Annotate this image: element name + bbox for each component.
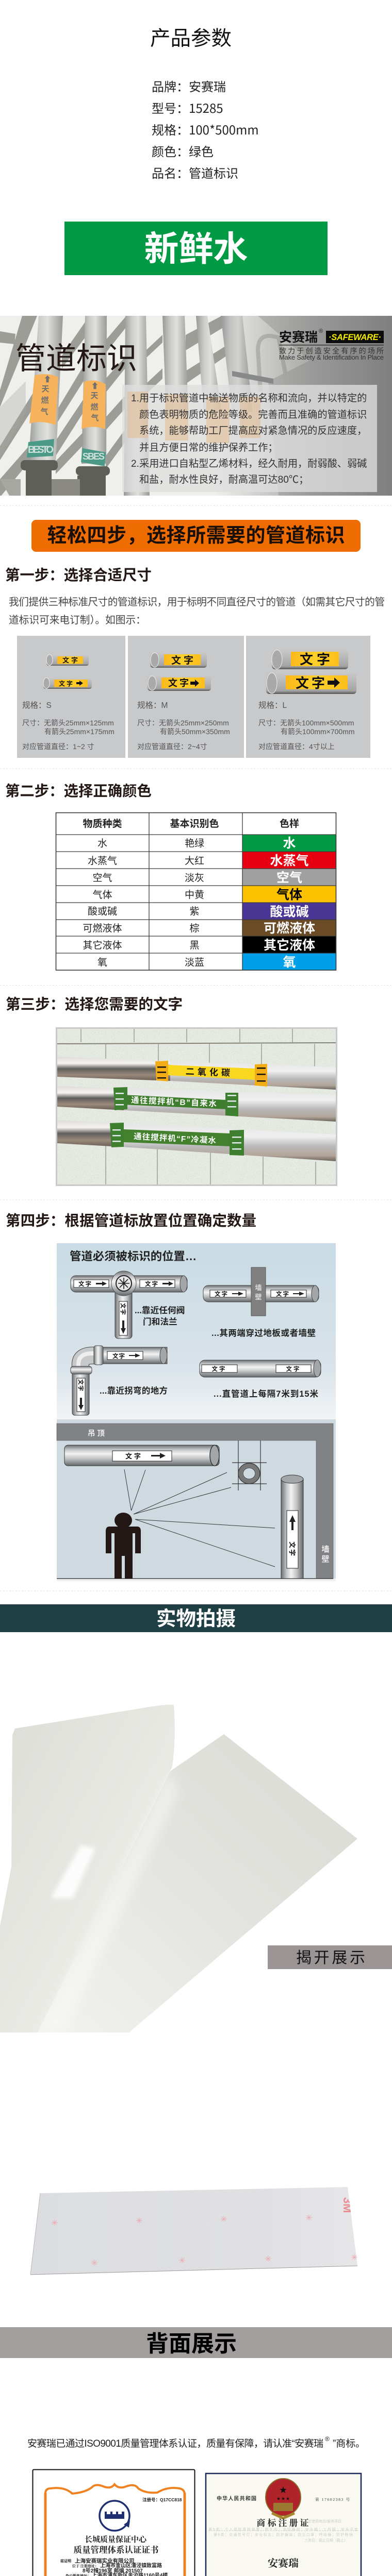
faint goods lines: 三类目；截止日期（截止） bbox=[304, 2538, 348, 2543]
certificate text: 8号2幢196室 邮编 201507 bbox=[83, 2567, 143, 2574]
table rows: 水 bbox=[97, 838, 107, 849]
orange pipe labels: 天 bbox=[90, 392, 99, 400]
product parameter list: 15285 bbox=[189, 98, 223, 116]
straight pipe: 文字 bbox=[211, 1365, 227, 1372]
person silhouette bbox=[106, 1513, 141, 1579]
orange pipe labels: 燃 bbox=[90, 402, 99, 412]
ceiling and wall bbox=[57, 1423, 333, 1579]
color identification table bbox=[56, 812, 336, 970]
photo: peeled sheet bbox=[0, 1705, 357, 2032]
green label B: 通往搅拌机“B”自来水 bbox=[131, 1095, 217, 1109]
pipe S with arrow bbox=[43, 678, 92, 689]
sight lines bbox=[124, 1469, 275, 1567]
color swatches bbox=[242, 835, 336, 970]
brand logo bbox=[279, 328, 384, 361]
table rows: 淡蓝 bbox=[185, 957, 204, 968]
orange pipe labels: 气 bbox=[91, 413, 99, 422]
table rows: 紫 bbox=[189, 906, 200, 917]
certification statement bbox=[27, 2435, 365, 2449]
national emblem: ★ ★ ★ bbox=[277, 2497, 289, 2501]
orange pipe labels: 气 bbox=[40, 407, 48, 416]
header text: 第 17602383 号 bbox=[315, 2497, 350, 2502]
product parameter list: 100*500mm bbox=[189, 120, 259, 138]
fold shine bbox=[38, 1771, 178, 2032]
pipe L with arrow bbox=[266, 673, 356, 694]
banner: four easy steps bbox=[31, 520, 361, 552]
caption: every 7 to 15 meters: ...直管道上每隔7米到15米 bbox=[214, 1388, 319, 1399]
certificate text: 质量管理体系认证证书 bbox=[73, 2545, 159, 2555]
panel: size S bbox=[17, 636, 125, 758]
translucent description panel: 系统，能够帮助工厂提高应对紧急情况的反应速度， bbox=[139, 425, 367, 436]
valve tee pipe bbox=[71, 1271, 187, 1338]
brand logo: ® bbox=[319, 328, 323, 334]
pipe L without arrow: 文字 bbox=[300, 652, 334, 667]
certificate title: 商标注册证 bbox=[257, 2518, 311, 2528]
green asbestos bands bbox=[27, 439, 106, 466]
translucent description panel: 并且方便日常的维护保养工作； bbox=[139, 442, 278, 453]
ceiling and wall: 墙 bbox=[321, 1545, 330, 1554]
orange pipe labels bbox=[29, 374, 106, 429]
vertical wall pipe bbox=[281, 1475, 303, 1579]
certificate text bbox=[60, 2497, 182, 2576]
national emblem: ★ bbox=[279, 2486, 287, 2495]
table rows bbox=[83, 838, 204, 968]
product parameter list: 品名： bbox=[152, 163, 189, 181]
swatch labels: 空气 bbox=[276, 871, 302, 885]
table rows: 氧 bbox=[97, 957, 107, 968]
product parameter list: 颜色： bbox=[152, 142, 189, 160]
header text bbox=[217, 2495, 350, 2502]
green product sample label bbox=[64, 222, 328, 275]
pipe 1 bbox=[57, 1057, 170, 1081]
swatch labels: 可燃液体 bbox=[264, 921, 315, 936]
caption: near bends: ...靠近拐弯的地方 bbox=[100, 1385, 168, 1396]
pink liner marks: ✳ bbox=[51, 2219, 58, 2228]
translucent description panel: 颜色表明物质的危险等级。完善而且准确的管道标识 bbox=[139, 409, 367, 420]
certificate text: 位于 注册地址： bbox=[72, 2564, 99, 2568]
orange pipe labels: ⬆ bbox=[43, 375, 52, 384]
caption: near valves and flanges: 门和法兰 bbox=[143, 1317, 177, 1327]
elbow pipe: 文字 bbox=[77, 1379, 85, 1392]
caption: near valves and flanges: ...靠近任何阀 bbox=[135, 1306, 185, 1315]
size M text: 规格：M bbox=[137, 701, 168, 710]
banner: back display: 背面展示 bbox=[146, 2331, 237, 2357]
size L text: 尺寸：无箭头100mm×500mm bbox=[258, 719, 354, 727]
product parameter list: 绿色 bbox=[189, 142, 214, 160]
table rows: 大红 bbox=[185, 855, 204, 867]
pink liner marks bbox=[51, 2214, 358, 2268]
size M text: 尺寸：无箭头25mm×250mm bbox=[137, 719, 229, 727]
size S text: 尺寸：无箭头25mm×125mm bbox=[22, 719, 114, 727]
wall crossing pipe: 文字 bbox=[215, 1290, 228, 1297]
table rows: 艳绿 bbox=[185, 838, 204, 849]
table header: 物质种类 bbox=[83, 818, 122, 829]
banner: four easy steps: 轻松四步，选择所需要的管道标识 bbox=[47, 525, 345, 547]
straight pipe: 文字 bbox=[286, 1365, 301, 1372]
step 1 description bbox=[9, 594, 385, 626]
step 1 description: 道标识可来电订制）。如图示： bbox=[9, 612, 146, 626]
pink liner marks: ✳ bbox=[91, 2259, 98, 2268]
translucent description panel: 2.采用进口自粘型乙烯材料，经久耐用，耐弱酸、弱碱 bbox=[131, 458, 367, 469]
faint goods lines: 第9类；交通信号灯；安全标志；防护服装；防尘口罩；呼吸器；防护眼镜 bbox=[214, 2532, 353, 2537]
header text: 中华人民共和国 bbox=[217, 2495, 256, 2502]
pipe hanger ring bbox=[232, 1440, 267, 1490]
size M text bbox=[137, 701, 230, 751]
swatch labels: 酸或碱 bbox=[270, 905, 309, 919]
product parameter list: 规格： bbox=[152, 120, 189, 138]
certification statement: 安赛瑞已通过ISO9001质量管理体系认证，质量有保障，请认准“安赛瑞 bbox=[27, 2438, 323, 2449]
panel: pipe marking hero bbox=[0, 316, 392, 497]
pipe S with arrow: 文字 bbox=[59, 680, 74, 687]
tag: peel display: 揭开展示 bbox=[296, 1950, 365, 1967]
tag: peel display bbox=[268, 1945, 392, 1969]
banner: real photos: 实物拍摄 bbox=[156, 1608, 236, 1630]
table rows: 气体 bbox=[92, 889, 112, 901]
caption: through walls: ...其两端穿过地板或者墙壁 bbox=[211, 1328, 316, 1338]
certificate: trademark registration bbox=[205, 2472, 362, 2576]
product parameter list bbox=[152, 77, 259, 181]
brand logo: ·SAFEWARE· bbox=[329, 333, 381, 342]
swatch labels bbox=[264, 836, 315, 970]
pipe S without arrow: 文字 bbox=[62, 656, 80, 664]
pipe M with arrow: 文字 bbox=[168, 677, 191, 688]
photo: back of sheet: 3M bbox=[341, 2197, 354, 2213]
step 1 heading: 第一步：选择合适尺寸 bbox=[5, 567, 152, 584]
banner: real photos bbox=[0, 1604, 392, 1632]
wall crossing pipe: 文字 bbox=[276, 1290, 290, 1297]
straight pipe bbox=[200, 1360, 321, 1377]
table rows: 中黄 bbox=[185, 889, 204, 901]
size M text: 对应管道直径：2~4寸 bbox=[137, 742, 207, 751]
product parameter list: 品牌： bbox=[152, 77, 189, 95]
ceiling pipe bbox=[64, 1445, 219, 1466]
faint goods lines: 第9类：个人用防事故装置；救生衣；消防器材；安全帽；工作服；安全手套 bbox=[208, 2527, 358, 2532]
green asbestos bands: BESTO bbox=[28, 445, 54, 455]
panel: size M bbox=[128, 636, 244, 758]
pipe flanges bbox=[0, 460, 110, 496]
pink liner marks: ✳ bbox=[305, 2214, 313, 2223]
hero title: 管道标识 bbox=[15, 342, 137, 376]
table rows: 水蒸气 bbox=[88, 855, 117, 867]
brick mortar lines bbox=[57, 1029, 336, 1186]
green label F: 通往搅拌机“F”冷凝水 bbox=[134, 1131, 217, 1145]
pink liner marks: ✳ bbox=[136, 2217, 143, 2226]
orange pipe labels: 天 bbox=[41, 385, 50, 394]
pipe L with arrow: 文字 bbox=[296, 675, 328, 691]
certification statement: ® bbox=[325, 2435, 330, 2443]
left sheet bbox=[0, 1705, 175, 2032]
swatch labels: 水 bbox=[283, 836, 296, 851]
brand logo: 安赛瑞 bbox=[279, 330, 318, 345]
vertical pipes bbox=[28, 316, 253, 496]
certificate text: 注册号：Q17CC818 bbox=[142, 2497, 182, 2502]
photo: back of sheet bbox=[30, 2187, 358, 2275]
product parameter list: 安赛瑞 bbox=[189, 77, 226, 95]
size M text: 有箭头50mm×350mm bbox=[160, 727, 230, 736]
faint goods lines bbox=[208, 2519, 358, 2543]
swatch labels: 气体 bbox=[276, 888, 302, 902]
elbow pipe: 文字 bbox=[112, 1352, 125, 1360]
national emblem bbox=[266, 2479, 301, 2518]
product parameter list: 型号： bbox=[152, 98, 189, 116]
faint goods lines: 核定使用商品/服务项目 bbox=[304, 2519, 341, 2523]
step 4 heading: 第四步：根据管道标放置位置确定数量 bbox=[6, 1212, 256, 1229]
size L text: 有箭头100mm×700mm bbox=[281, 727, 355, 736]
size S text: 有箭头25mm×175mm bbox=[44, 727, 115, 736]
table rows: 淡灰 bbox=[185, 872, 204, 884]
wall crossing pipe: 墙 bbox=[255, 1284, 262, 1292]
green label F bbox=[110, 1123, 244, 1156]
certificate text: 上海安赛瑞实业有限公司 bbox=[75, 2557, 134, 2564]
ceiling and wall: 吊顶 bbox=[88, 1429, 107, 1438]
swatch labels: 氧 bbox=[283, 955, 296, 970]
valve tee pipe: 文字 bbox=[145, 1280, 159, 1287]
pipe M without arrow bbox=[150, 653, 207, 668]
brand logo: 致力于创造安全有序的场所 bbox=[279, 347, 384, 355]
elbow pipe bbox=[71, 1346, 167, 1415]
green asbestos bands: SBES bbox=[83, 451, 105, 462]
right sheet bbox=[38, 1734, 357, 2032]
panel: size L bbox=[246, 636, 370, 758]
size L text: 对应管道直径：4寸以上 bbox=[258, 742, 335, 751]
size L text: 规格：L bbox=[258, 701, 287, 710]
table header: 基本识别色 bbox=[170, 818, 219, 829]
step 2 heading: 第二步：选择正确颜色 bbox=[5, 783, 152, 800]
certificate text: 上海市金山区漕泾镇致富路 bbox=[100, 2562, 162, 2569]
pipe S without arrow bbox=[46, 654, 89, 666]
pipe 2 bbox=[57, 1086, 124, 1110]
ceiling pipe: 文字 bbox=[125, 1452, 143, 1460]
pink liner marks: ✳ bbox=[265, 2255, 272, 2264]
orange pipe labels: ⬆ bbox=[91, 382, 99, 391]
certificate text: 兹证明 bbox=[60, 2558, 71, 2563]
swatch labels: 水蒸气 bbox=[270, 854, 309, 868]
vertical wall pipe: 文字 bbox=[288, 1541, 296, 1557]
wall crossing pipe: 壁 bbox=[255, 1293, 262, 1301]
translucent description panel: 和盐，耐水性良好，耐高温可达80℃； bbox=[139, 474, 308, 485]
step 1 description: 我们提供三种标准尺寸的管道标识，用于标明不同直径尺寸的管道（如需其它尺寸的管 bbox=[9, 594, 385, 608]
certificate: ISO9001 bbox=[33, 2470, 195, 2576]
brand logo: Make Safety & Identification In Place bbox=[279, 353, 384, 361]
trademark name: 安赛瑞 bbox=[268, 2557, 299, 2569]
glossy highlight bbox=[51, 1845, 95, 1898]
pink liner marks: ✳ bbox=[351, 2253, 358, 2262]
valve tee pipe: 文字 bbox=[78, 1280, 92, 1287]
banner: back display bbox=[0, 2327, 392, 2358]
certification logo bbox=[100, 2501, 130, 2531]
pipe 3 bbox=[57, 1120, 121, 1147]
pink liner marks: ✳ bbox=[220, 2215, 227, 2224]
green label B bbox=[113, 1087, 238, 1116]
swatch labels: 其它液体 bbox=[264, 938, 315, 953]
photo: labelled pipes on brick wall bbox=[56, 1027, 337, 1186]
translucent description panel: 1.用于标识管道中输送物质的名称和流向，并以特定的 bbox=[131, 393, 367, 404]
yellow label: 二氧化碳 bbox=[186, 1066, 233, 1078]
diagram panel: where pipes must be marked bbox=[57, 1243, 336, 1419]
orange pipe labels: 燃 bbox=[41, 396, 49, 405]
size S text: 对应管道直径：1~2 寸 bbox=[22, 742, 94, 751]
table header bbox=[83, 818, 299, 829]
valve tee pipe: 文字 bbox=[120, 1303, 127, 1315]
step 3 heading: 第三步：选择您需要的文字 bbox=[6, 996, 183, 1013]
pipe M without arrow: 文字 bbox=[171, 654, 196, 666]
table rows: 其它液体 bbox=[83, 940, 122, 951]
size L text bbox=[258, 701, 355, 751]
orange ornamental frame bbox=[45, 2484, 185, 2576]
table rows: 棕 bbox=[189, 923, 200, 934]
translucent description panel bbox=[122, 385, 377, 492]
wall crossing pipe bbox=[203, 1267, 319, 1316]
table rows: 黑 bbox=[189, 940, 200, 951]
table rows: 空气 bbox=[92, 872, 112, 884]
pipe L without arrow bbox=[272, 650, 348, 669]
certification statement: ”商标。 bbox=[333, 2438, 365, 2449]
pipe M with arrow bbox=[148, 676, 211, 691]
ceiling and wall: 壁 bbox=[321, 1554, 330, 1564]
table rows: 可燃液体 bbox=[83, 923, 122, 934]
table header: 色样 bbox=[280, 818, 299, 829]
product parameter list: 管道标识 bbox=[189, 163, 238, 181]
table rows: 酸或碱 bbox=[88, 906, 117, 917]
certificate text: 长城质量保证中心 bbox=[85, 2535, 148, 2544]
diagram title: 管道必须被标识的位置… bbox=[70, 1249, 197, 1263]
size S text: 规格：S bbox=[22, 701, 52, 710]
heading: product parameters: 产品参数 bbox=[150, 22, 232, 52]
diagram panel: line of sight bbox=[57, 1419, 336, 1581]
pink liner marks: ✳ bbox=[178, 2257, 186, 2265]
size S text bbox=[22, 701, 115, 751]
caption: near valves and flanges bbox=[135, 1306, 185, 1327]
green product sample label: 新鲜水 bbox=[144, 230, 248, 268]
yellow label bbox=[155, 1061, 267, 1087]
